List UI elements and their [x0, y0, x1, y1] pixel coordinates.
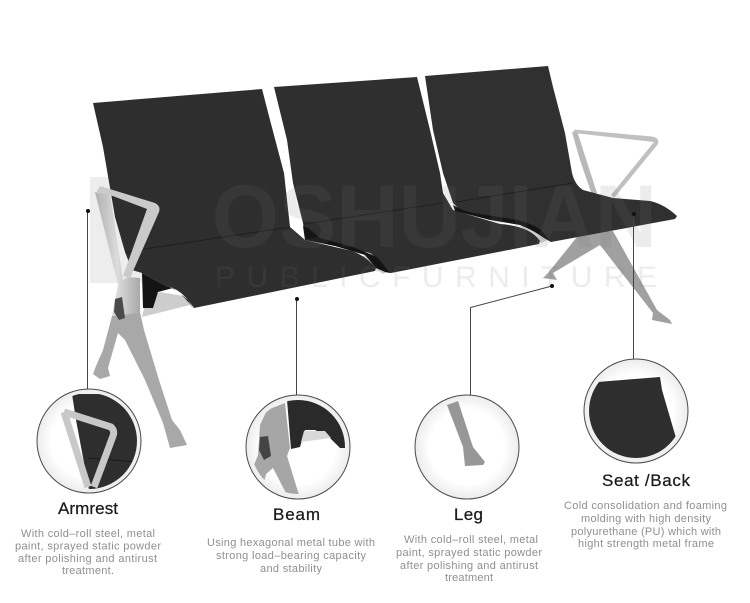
- text: beam description: [207, 537, 375, 575]
- text: armrest description: With cold–roll steel, metal: [21, 528, 155, 540]
- seat 1: [93, 89, 376, 308]
- text: seat/back description: polyurethane (PU) which with: [571, 526, 721, 538]
- watermark text: OSHUJIAN: [212, 166, 657, 266]
- heading: armrest: Armrest: [58, 499, 118, 518]
- text: armrest description: treatment.: [62, 565, 114, 577]
- seat 2: [274, 77, 540, 273]
- right arm and legs: [543, 130, 672, 324]
- circle: armrest detail: [37, 389, 145, 495]
- label: beam: [207, 505, 375, 575]
- text: seat/back description: Cold consolidation and foaming: [564, 500, 727, 512]
- text: leg description: after polishing and antirust: [400, 560, 538, 572]
- heading: leg: Leg: [454, 505, 483, 524]
- label: seat/back: [564, 471, 727, 550]
- label: armrest: [15, 499, 161, 577]
- text: armrest description: [15, 528, 161, 577]
- circle: seat detail: [580, 359, 688, 470]
- text: armrest description: after polishing and antirust: [18, 553, 157, 565]
- text: beam description: strong load–bearing capacity: [216, 550, 366, 562]
- callout dots: [86, 209, 636, 301]
- chair: [93, 66, 677, 448]
- label: leg: [396, 505, 542, 584]
- text: leg description: treatment: [445, 572, 493, 584]
- text: leg description: [396, 534, 542, 584]
- heading: seat/back: Seat /Back: [602, 471, 690, 490]
- text: leg description: With cold–roll steel, metal: [404, 534, 538, 546]
- text: seat/back description: molding with high density: [581, 513, 712, 525]
- text: seat/back description: hight strength metal frame: [578, 538, 714, 550]
- seat shadows: [142, 205, 551, 308]
- watermark block: [90, 177, 197, 283]
- callout lines: [88, 211, 634, 395]
- seam lines: [125, 183, 573, 252]
- text: beam description: Using hexagonal metal tube with: [207, 537, 375, 549]
- text: leg description: paint, sprayed static powder: [396, 547, 542, 559]
- circle: leg detail: [415, 395, 519, 499]
- circle: beam detail: [246, 395, 350, 499]
- watermark text: PUBLICFURNITURE: [215, 261, 657, 294]
- heading: beam: Beam: [273, 505, 320, 524]
- text: armrest description: paint, sprayed static powder: [15, 540, 161, 552]
- text: beam description: and stability: [260, 563, 322, 575]
- beam pieces: [142, 222, 548, 317]
- left arm and legs: [93, 186, 187, 448]
- text: seat/back description: [564, 500, 727, 550]
- seat 3: [425, 66, 677, 242]
